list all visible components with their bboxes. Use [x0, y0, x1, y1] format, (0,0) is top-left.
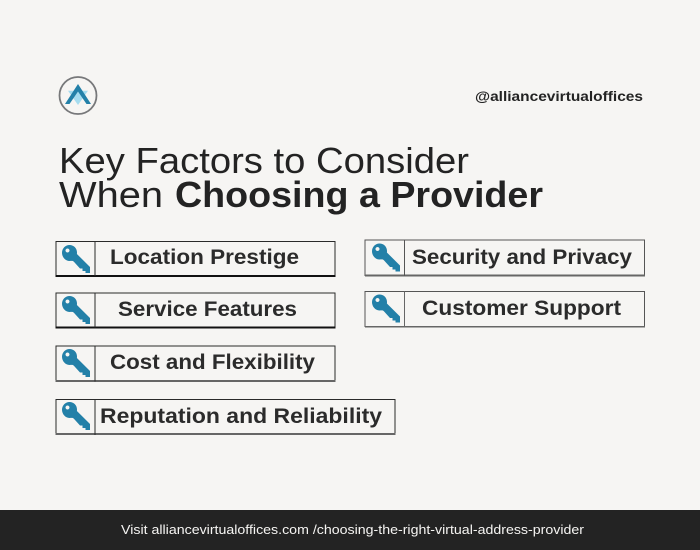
footer bar	[0, 510, 700, 550]
panel: service features: Service Features	[118, 298, 297, 321]
panel: cost and flexibility: Cost and Flexibility	[110, 351, 315, 374]
title: When	[59, 174, 163, 215]
title: Choosing a Provider	[175, 174, 543, 215]
panel: service features	[56, 292, 336, 328]
panel: location prestige: Location Prestige	[110, 246, 299, 269]
panel: reputation and reliability	[56, 399, 396, 435]
panel: customer support	[365, 292, 645, 328]
social handle: @alliancevirtualoffices	[475, 88, 643, 104]
panel: cost and flexibility	[56, 346, 336, 382]
panel: security and privacy: Security and Privacy	[412, 246, 632, 269]
title	[59, 140, 543, 215]
panel: location prestige	[56, 241, 336, 277]
title: Key Factors to Consider	[59, 140, 469, 181]
panel: security and privacy	[365, 240, 645, 276]
panel: customer support: Customer Support	[422, 297, 621, 320]
logo	[60, 77, 96, 114]
panel: reputation and reliability: Reputation and Reliability	[100, 405, 382, 428]
footer bar: Visit alliancevirtualoffices.com /choosing-the-right-virtual-address-provider	[121, 522, 585, 537]
